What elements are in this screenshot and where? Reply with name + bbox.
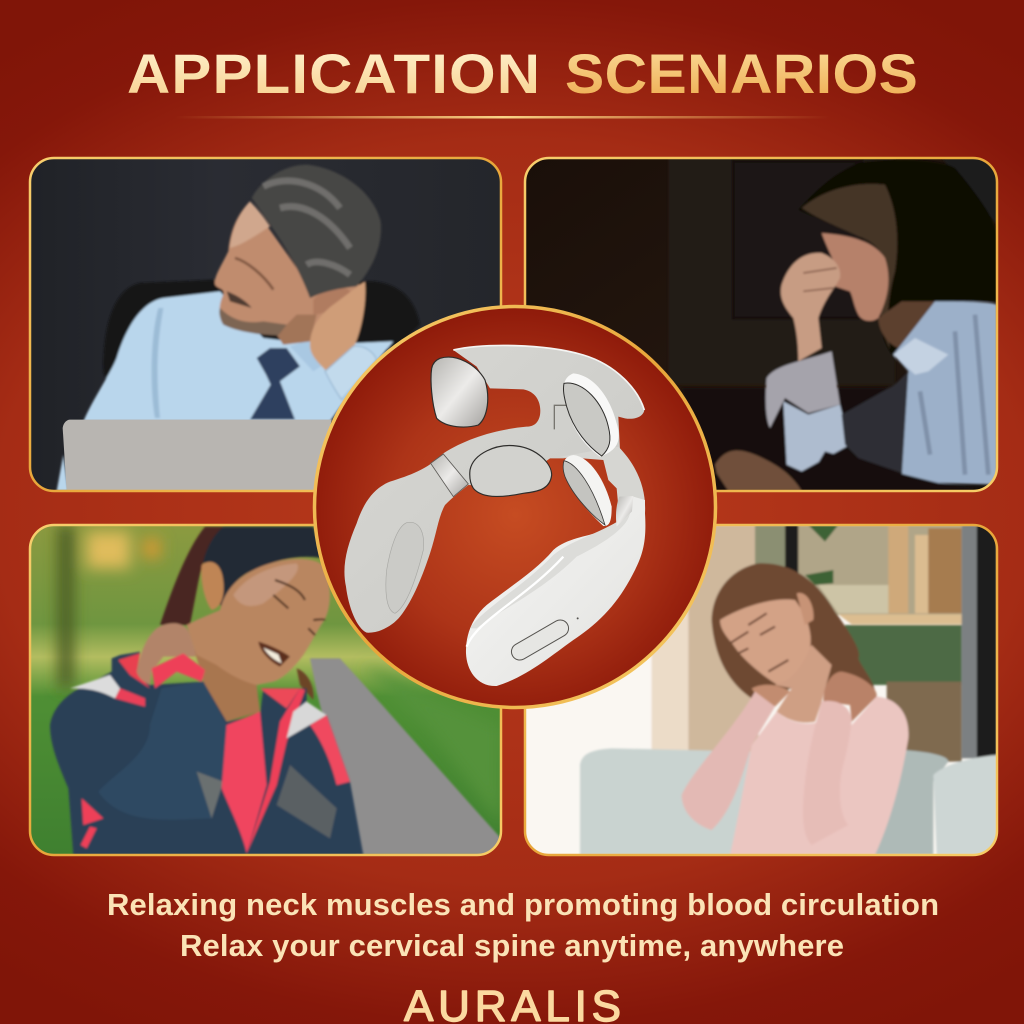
sleeve highlight bbox=[98, 682, 228, 820]
center product circle bbox=[314, 306, 716, 708]
ear bbox=[313, 288, 350, 315]
metal joint right bbox=[616, 496, 633, 527]
sleeve bbox=[783, 401, 850, 471]
left arm panel bbox=[386, 522, 424, 613]
jacket bbox=[50, 652, 363, 855]
neck and face bbox=[215, 201, 363, 345]
caption: Relaxing neck muscles and promoting blood circulation bbox=[107, 887, 939, 922]
pad: top right bbox=[564, 373, 619, 457]
sofa bbox=[580, 748, 825, 855]
raised hand bbox=[781, 253, 840, 361]
ear bbox=[797, 593, 814, 625]
left arm bbox=[682, 692, 775, 830]
shelf board bbox=[838, 614, 963, 624]
control button bbox=[508, 617, 572, 663]
grey arm and neck band bbox=[344, 345, 644, 633]
panel: woman with headache at desk bbox=[525, 158, 997, 491]
pink top bbox=[222, 712, 267, 853]
lower hand bbox=[715, 450, 802, 491]
bookshelf bbox=[798, 525, 962, 615]
pad: lower right bbox=[563, 455, 612, 526]
window bbox=[733, 161, 862, 318]
eyes and brows bbox=[273, 580, 325, 635]
panel: jogger with neck pain in park bbox=[30, 525, 501, 855]
collar bbox=[292, 340, 320, 370]
shirt bbox=[893, 301, 997, 485]
right arm bbox=[803, 701, 852, 845]
hand on neck bbox=[310, 281, 365, 371]
shirt bbox=[83, 291, 393, 421]
mouth bbox=[258, 642, 290, 667]
indicator dot bbox=[577, 617, 579, 619]
panel: woman on sofa rubbing neck bbox=[525, 525, 997, 855]
curtain bbox=[688, 525, 758, 755]
hair bbox=[712, 563, 875, 698]
pillar bbox=[962, 525, 977, 758]
eyes and mouth bbox=[730, 613, 788, 672]
park path bbox=[310, 658, 501, 855]
title: APPLICATION bbox=[127, 44, 540, 106]
cuff bbox=[766, 351, 840, 428]
metal joint bbox=[431, 454, 468, 497]
hair bbox=[252, 165, 381, 298]
neck bbox=[878, 301, 935, 348]
floor bbox=[682, 388, 895, 491]
shoulder panels bbox=[287, 702, 327, 738]
beard bbox=[219, 308, 287, 335]
shirt cuff bbox=[325, 346, 377, 400]
title: SCENARIOS bbox=[565, 43, 918, 106]
ear bbox=[201, 562, 224, 610]
caption: Relax your cervical spine anytime, anywhere bbox=[180, 928, 844, 963]
hinge mark bbox=[554, 405, 566, 429]
caption bbox=[107, 887, 939, 963]
cuff bbox=[152, 653, 205, 688]
panel: office worker with neck pain bbox=[30, 158, 501, 491]
face bbox=[187, 559, 330, 685]
hair bbox=[203, 527, 323, 608]
body upper grey strip bbox=[470, 513, 630, 628]
leaves bbox=[805, 525, 838, 585]
sweater body bbox=[730, 697, 908, 855]
basket bbox=[887, 682, 962, 762]
ponytail bbox=[160, 527, 223, 625]
wall panel bbox=[668, 158, 895, 385]
hands bbox=[752, 685, 790, 707]
hair bbox=[798, 160, 997, 355]
office chair bbox=[103, 280, 420, 391]
product: neck massager bbox=[344, 345, 645, 686]
pad: top left bbox=[431, 357, 488, 427]
face bbox=[720, 599, 811, 683]
face bbox=[822, 233, 888, 321]
pad: center bbox=[470, 446, 552, 496]
neck bbox=[193, 648, 260, 722]
plant bbox=[845, 625, 962, 685]
laptop bbox=[63, 420, 332, 491]
right arm body bbox=[466, 497, 645, 686]
band connecting to right arm bbox=[560, 447, 645, 520]
shirt chest bbox=[842, 371, 908, 475]
neck bbox=[775, 645, 832, 723]
title bbox=[127, 43, 918, 106]
tie bbox=[250, 348, 300, 420]
hand on neck bbox=[137, 623, 196, 685]
